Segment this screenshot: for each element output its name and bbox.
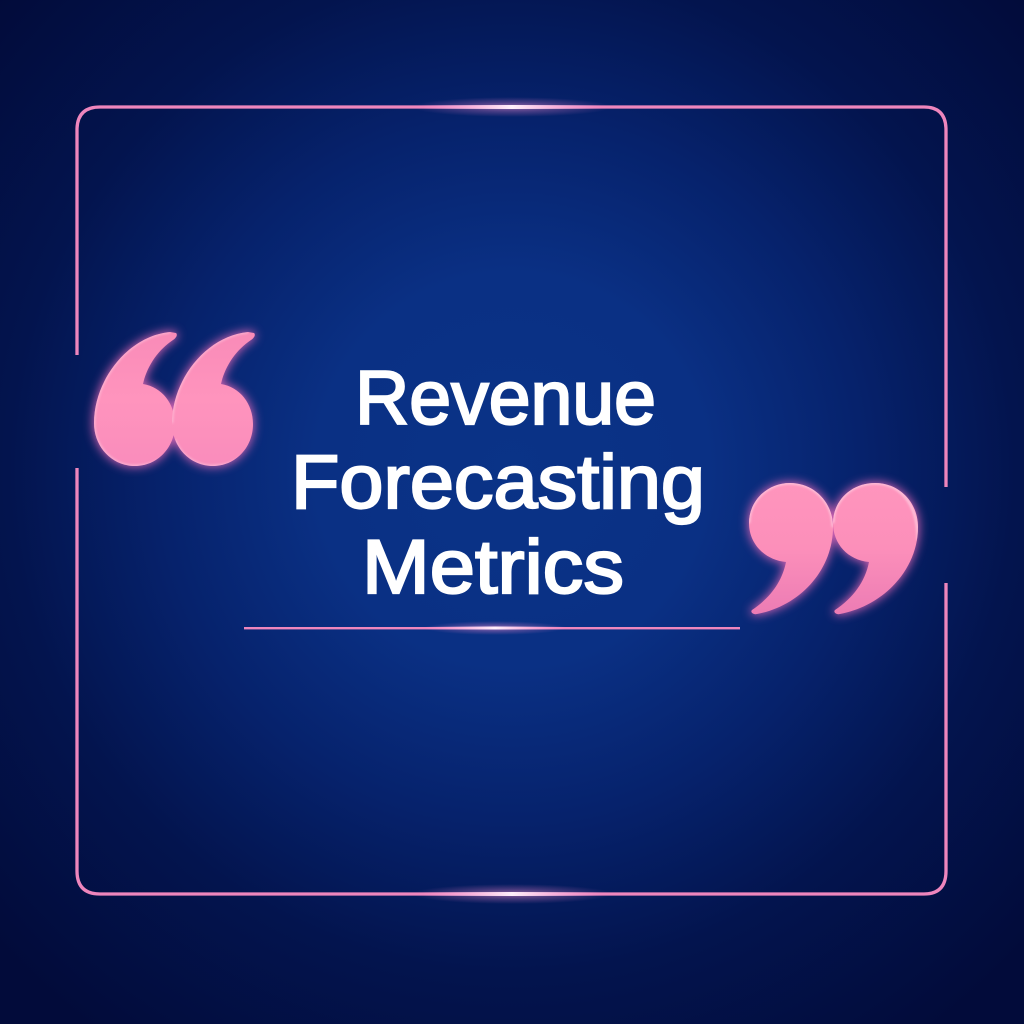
opening quotation mark xyxy=(94,332,255,466)
title: Forecasting xyxy=(291,440,705,525)
closing quotation mark xyxy=(749,483,918,614)
bottom flare xyxy=(412,884,612,904)
neon frame xyxy=(77,97,946,894)
top flare xyxy=(412,97,612,117)
underline xyxy=(244,621,740,635)
title: Revenue xyxy=(355,356,656,441)
title xyxy=(291,356,705,610)
title: Metrics xyxy=(362,525,624,610)
